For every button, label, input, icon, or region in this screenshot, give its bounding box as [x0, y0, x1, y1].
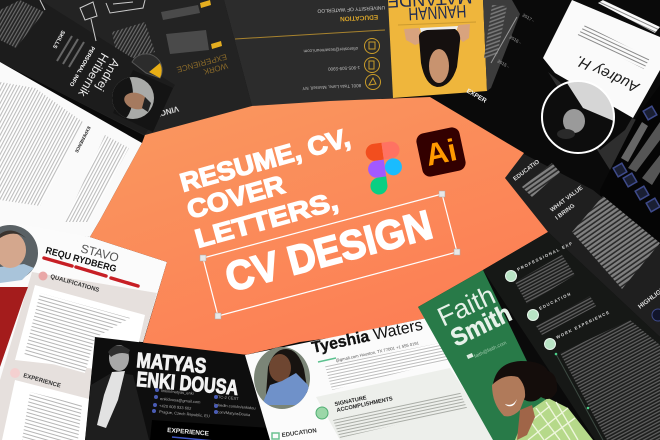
surname: ENKI DOUSA	[136, 368, 239, 400]
yellow tags	[200, 0, 222, 49]
panel: dark column right	[600, 85, 660, 300]
panel: Hannah resume	[387, 0, 487, 98]
contact list: x.com/MatyasDousa	[214, 409, 251, 417]
icon: Adobe Illustrator	[415, 126, 467, 178]
contact list: linkin/matyas_enki	[161, 388, 194, 396]
university: UNIVERSITY OF WATERLOO	[317, 4, 385, 14]
what value label: WHAT VALUE	[550, 185, 584, 214]
email: ofisroster@sesameuni.com	[303, 46, 358, 54]
contact list: +420 608 933 602	[159, 403, 192, 411]
yellow wedge	[132, 54, 162, 78]
divider	[398, 22, 476, 25]
white list card	[15, 285, 145, 373]
portrait	[0, 225, 38, 283]
accomplishments heading: SIGNATURE	[334, 395, 367, 408]
contact list	[159, 388, 256, 418]
CV Design text: CV DESIGN	[220, 201, 437, 301]
summary lines	[515, 255, 575, 304]
section heading professional: PROFESSIONAL EXP	[516, 240, 574, 272]
red sidebar	[0, 287, 28, 367]
photo square	[113, 70, 173, 132]
timeline	[556, 354, 604, 440]
white experience card	[2, 380, 93, 440]
face	[492, 376, 525, 416]
name last: REQU RYDBERG	[44, 245, 118, 275]
text column	[0, 82, 83, 206]
panel: signature letter	[543, 0, 660, 118]
yellow accent	[149, 63, 162, 78]
job lines	[161, 5, 200, 20]
panel: Gustavo resume	[0, 220, 167, 440]
education lines	[522, 163, 560, 197]
panel: Faith dark page	[483, 232, 660, 440]
photo	[112, 77, 154, 119]
work experience heading: EXPERIENCE	[176, 52, 228, 74]
summary	[325, 342, 456, 390]
name first: STAVO	[79, 241, 120, 265]
professional title lines	[577, 25, 650, 69]
dates: 2017 -	[522, 13, 535, 23]
contact icons	[364, 38, 380, 90]
skills label: SKILLS	[51, 29, 66, 49]
dates	[496, 13, 535, 69]
i bring label: I BRING	[555, 203, 577, 222]
smile	[505, 399, 517, 406]
line art icons	[40, 0, 145, 41]
experience heading: EXPERIENCE	[74, 126, 92, 154]
mail icon	[466, 353, 474, 359]
panel: value sheet	[505, 153, 660, 337]
timeline	[491, 17, 517, 63]
blue icon boxes	[613, 106, 660, 212]
pale panel	[316, 368, 497, 440]
icon: Figma logo	[365, 140, 405, 196]
qualifications icon	[38, 272, 48, 280]
experience heading: EXPERIENCE	[22, 373, 61, 390]
experience heading: EXPERIENCE	[167, 427, 210, 438]
benefit lines	[621, 122, 648, 162]
selection box with CV Design	[200, 191, 460, 319]
photo	[254, 347, 310, 409]
contact list: UTC-2 CEST	[215, 394, 239, 401]
green badge	[316, 407, 328, 419]
heading: Cover: COVER	[184, 169, 288, 225]
panel: Tyeshia resume	[245, 317, 497, 440]
accomplishments heading two: ACCOMPLISHMENTS	[336, 396, 394, 414]
work entries text	[112, 22, 155, 62]
section icons	[506, 270, 556, 350]
qualification lines	[24, 293, 130, 373]
icon: Adobe Illustrator: Ai	[422, 132, 460, 173]
shirt checks	[520, 402, 578, 440]
timeline dots	[555, 353, 589, 409]
photo	[404, 24, 470, 87]
neck	[517, 405, 535, 440]
surname: Hribernik	[75, 50, 112, 100]
address: 8001 Tista Lane, Mansell, NY	[302, 83, 361, 91]
red tags	[44, 258, 138, 286]
benefit lines three	[642, 155, 660, 185]
panel: Faith green sidebar	[418, 270, 565, 440]
education heading: EDUCATION	[281, 428, 317, 439]
education heading: EDUCATION	[339, 13, 378, 22]
accomplishments lines	[333, 392, 467, 438]
experience label: EXPER	[465, 88, 488, 105]
divider line	[235, 30, 385, 39]
panel: white resume	[0, 62, 142, 237]
panel: Andrej resume	[0, 0, 175, 135]
education lines	[536, 296, 596, 335]
panel: education resume	[224, 0, 395, 106]
hair	[493, 361, 557, 402]
experience lines	[22, 392, 82, 440]
portrait	[85, 345, 149, 440]
section heading education: EDUCATION	[538, 291, 572, 311]
name: Andrej	[93, 56, 123, 94]
experience line	[172, 437, 225, 440]
contact list: enkidousa@gmail.com	[160, 396, 201, 405]
timeline lines	[484, 5, 507, 58]
personal info label: PERSONAL INFO	[67, 45, 95, 88]
panel: dark resume top left	[0, 0, 252, 136]
text column two	[65, 135, 129, 222]
education icon	[272, 433, 279, 439]
signature: Audrey H.	[573, 52, 643, 96]
panel: timeline sheet	[465, 0, 535, 105]
experience icon	[10, 368, 20, 378]
panel: orange centre shape	[90, 97, 548, 355]
panel: Matyas resume	[85, 337, 270, 440]
name: MATYAS	[136, 349, 207, 378]
experience card	[150, 420, 272, 440]
heading: Resume CV: RESUME, CV,	[177, 122, 353, 198]
beige panel	[0, 272, 157, 440]
contact list: linkedin.com/in/enkidou	[214, 402, 256, 411]
dates: 2015 -	[496, 59, 510, 69]
email: faith@faith.com	[473, 340, 508, 360]
top text lines	[0, 0, 44, 48]
section heading work: WORK EXPERIENCE	[555, 309, 611, 340]
education label: EDUCATIO	[513, 159, 541, 183]
first name: Faith	[433, 280, 500, 332]
body with gingham shirt	[515, 398, 593, 440]
paragraph	[572, 196, 660, 289]
phone: 1-905-509-5900	[327, 65, 360, 72]
benefit lines two	[628, 122, 660, 172]
dates: 2016 -	[508, 35, 522, 45]
VINCT name: VINCT	[154, 104, 180, 119]
photo: Faith portrait	[492, 361, 593, 440]
work heading: WORK	[202, 61, 229, 76]
job lines two	[166, 30, 209, 54]
name: HANNAH	[408, 1, 467, 24]
green rule	[318, 358, 336, 362]
photo: woman portrait circle	[541, 72, 636, 170]
experience lines	[560, 320, 660, 440]
qualifications heading: QUALIFICATIONS	[49, 274, 100, 294]
last name: Smith	[446, 299, 516, 352]
badge	[652, 309, 660, 321]
skill dots	[57, 36, 84, 67]
contact line: @gmail.com Houston, TX 77001 +1 555 0191	[335, 340, 420, 363]
contact list: Prague, Czech Republic, EU	[159, 409, 210, 418]
contact dots	[152, 388, 218, 414]
letter text	[598, 0, 660, 33]
name: Tyeshia Waters	[310, 317, 424, 357]
heading: Letters: LETTERS,	[192, 186, 341, 254]
